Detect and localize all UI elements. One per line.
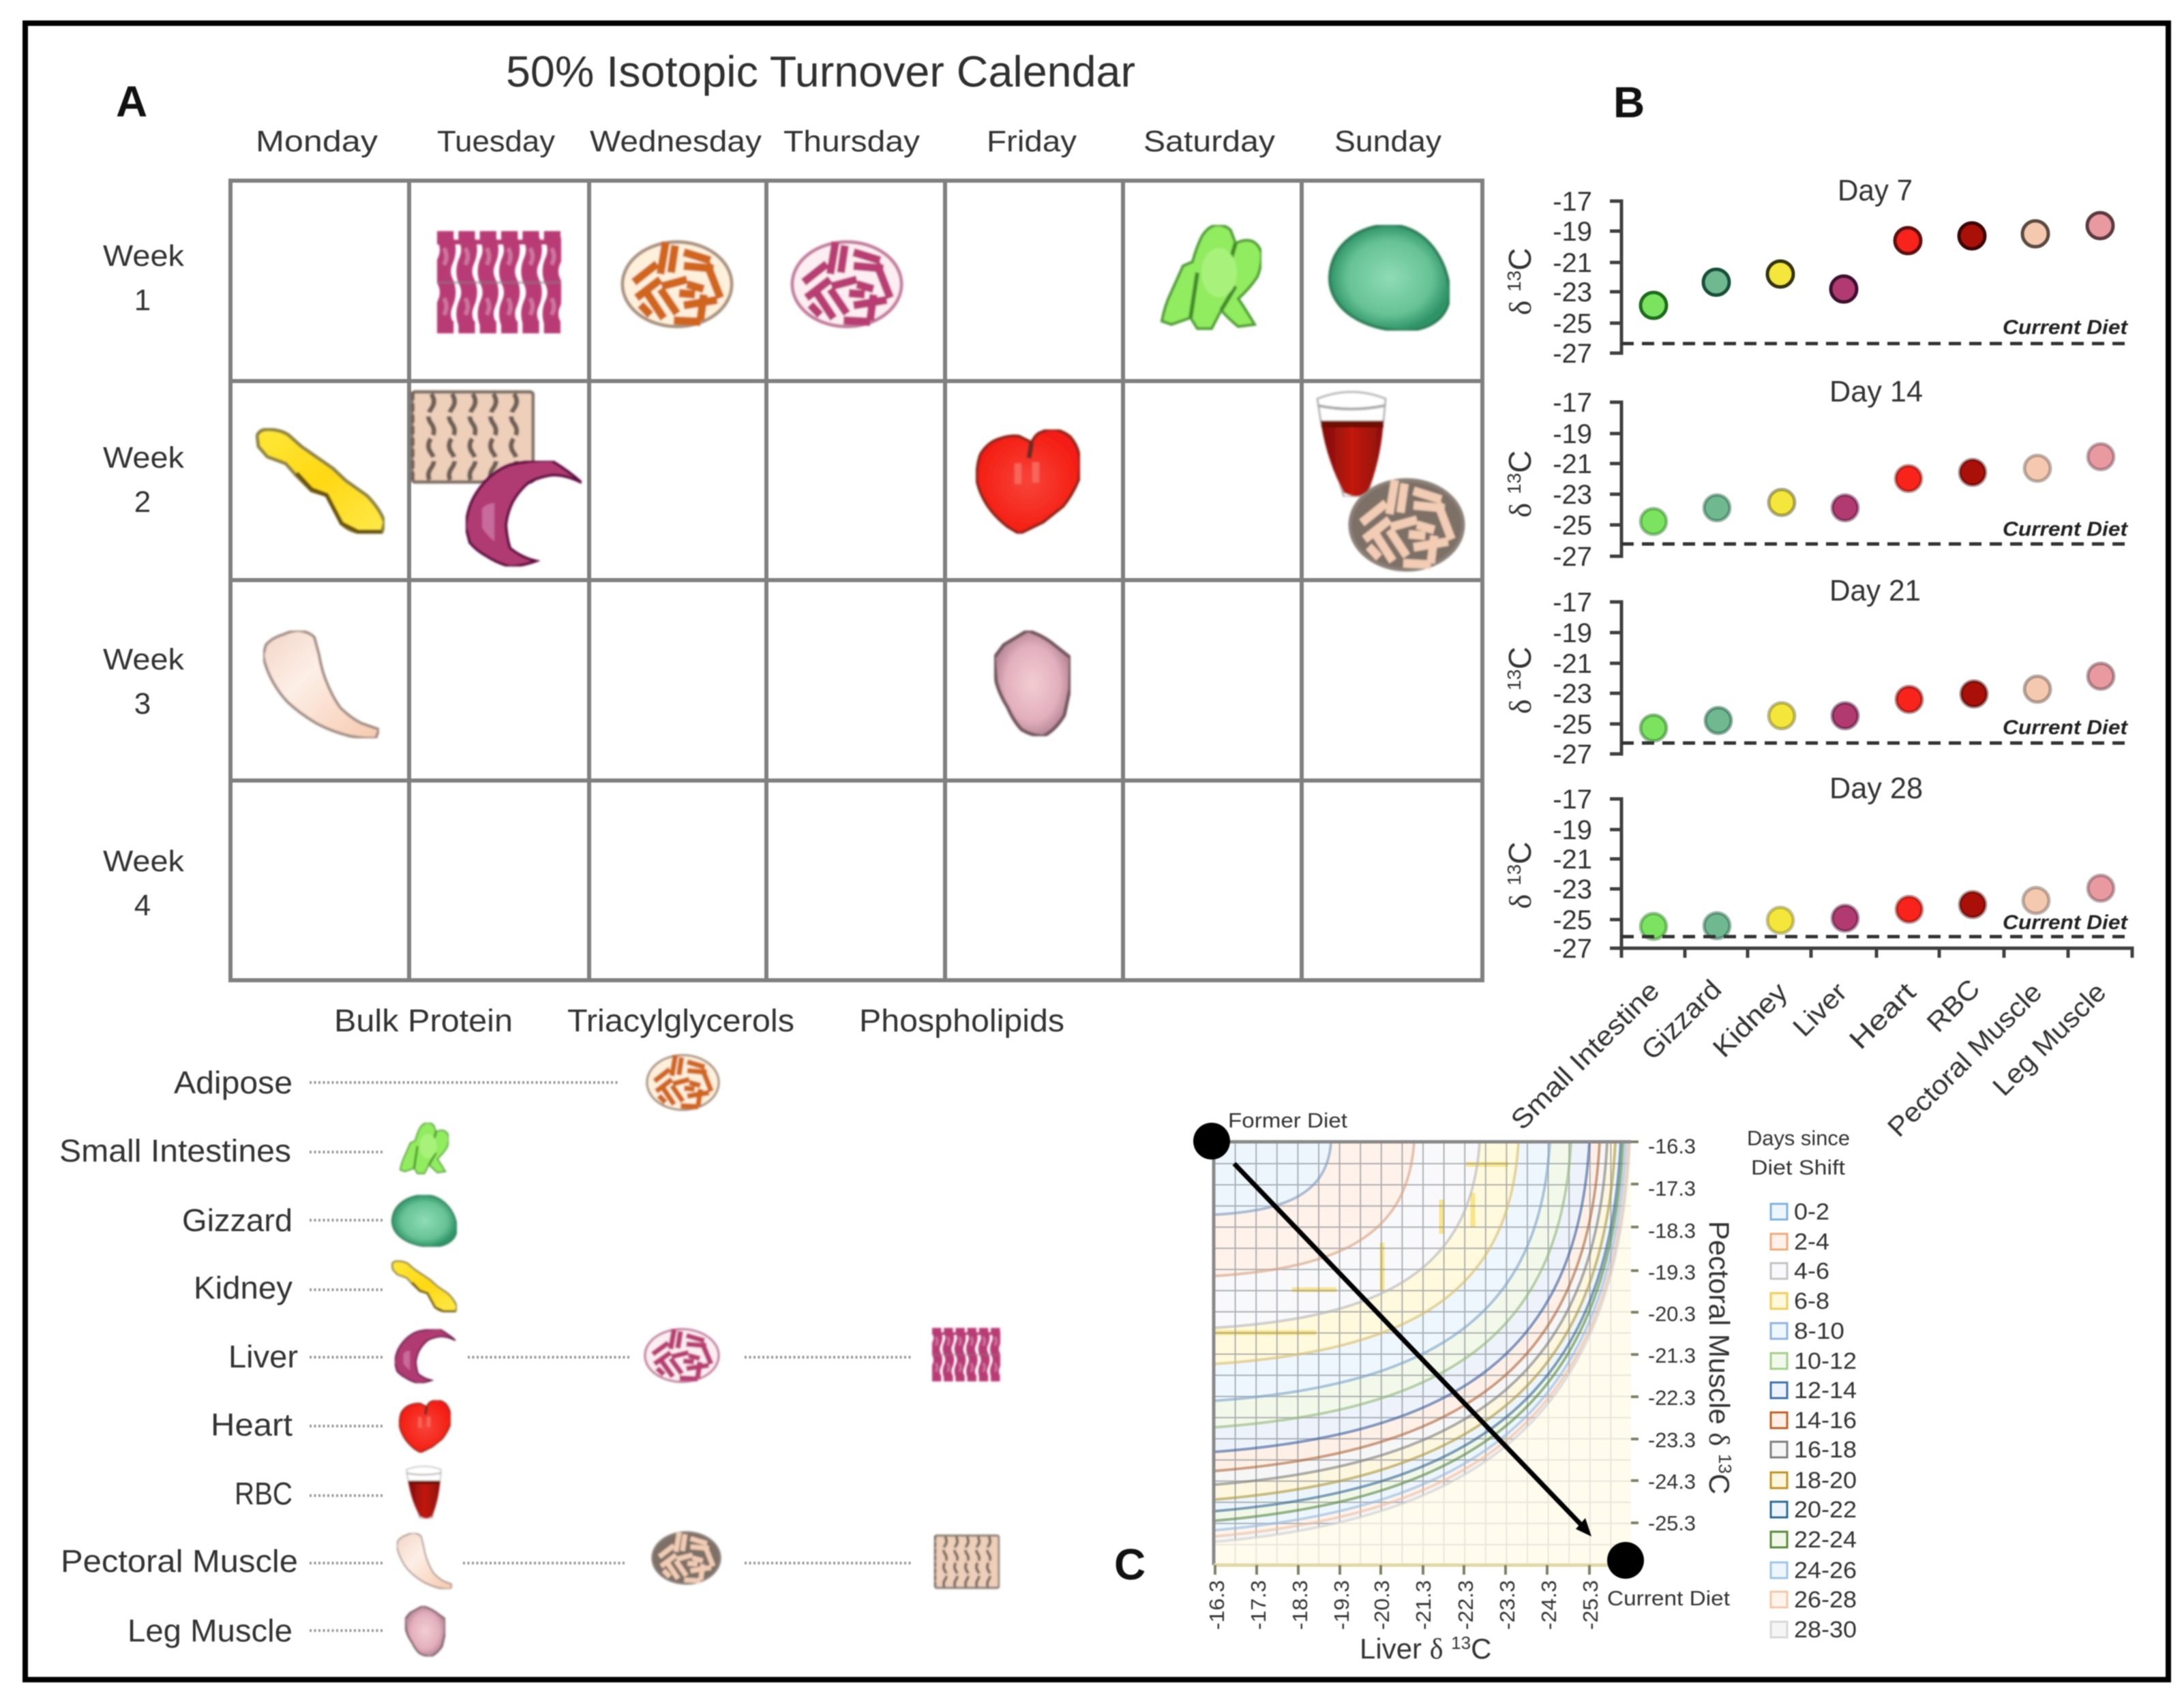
legend: days since diet shift: 22-24: [1794, 1527, 1857, 1553]
chart: Day 28: 13: [1504, 864, 1525, 885]
legend: days since diet shift: 18-20: [1794, 1468, 1857, 1494]
key row: pectoral muscle: Pectoral Muscle: [61, 1543, 298, 1579]
icon: liver triacylglycerols, week 1 Thursday: [792, 242, 901, 327]
right axis values: -25.3: [1648, 1511, 1696, 1535]
legend: days since diet shift: 20-22: [1794, 1497, 1857, 1523]
chart: Day 7: -21: [1553, 248, 1592, 278]
chart: Day 28: Current Diet: [2003, 911, 2129, 934]
bottom axis values: -20.3: [1370, 1580, 1394, 1630]
week row labels: 3: [134, 687, 151, 721]
chart: Day 14: -27: [1553, 542, 1592, 572]
weekday headers: Tuesday: [437, 125, 555, 158]
chart: Day 21: 13: [1504, 669, 1525, 691]
panel A: isotopic turnover calendar: [103, 77, 1482, 980]
title: 50% Isotopic Turnover Calendar: [506, 47, 1135, 96]
chart: Day 7: Current Diet: [2003, 316, 2129, 339]
legend: days since diet shift: 14-16: [1794, 1408, 1857, 1434]
chart: Day 14: 13: [1504, 473, 1525, 494]
y axis title: Pectoral Muscle δ: [1703, 1221, 1735, 1446]
chart: Day 28: [1502, 772, 2132, 964]
legend: days since diet shift: 0-2: [1794, 1199, 1829, 1225]
panel B: tissue isotope values over time: [1502, 78, 2132, 1142]
bottom axis values: -24.3: [1537, 1580, 1561, 1630]
tissue axis labels: Small Intestine: [1506, 975, 1665, 1136]
icon: pectoral phospholipids, week 2 Tuesday: [412, 392, 533, 483]
bottom axis values: -16.3: [1205, 1580, 1229, 1630]
legend: days since diet shift: 12-14: [1794, 1378, 1857, 1404]
chart: Day 7: δ: [1503, 301, 1538, 315]
chart: Day 21: δ: [1503, 699, 1538, 714]
weekday headers: Monday: [256, 125, 378, 158]
chart: Day 7: -17: [1553, 187, 1592, 217]
panel label A: A: [116, 77, 147, 126]
week row labels: Week: [103, 441, 185, 474]
chart: Day 21: Current Diet: [2003, 716, 2129, 739]
chart: Day 21: -23: [1553, 679, 1592, 709]
legend: days since diet shift: Diet Shift: [1751, 1155, 1845, 1179]
icon: pectoral triacylglycerols, week 2 Sunday: [1350, 480, 1463, 570]
legend: days since diet shift: 16-18: [1794, 1437, 1857, 1463]
chart: Day 28: C: [1502, 842, 1538, 864]
chart: Day 21: [1502, 574, 2129, 770]
x axis title: Liver δ: [1360, 1633, 1443, 1665]
bottom axis values: -18.3: [1288, 1580, 1312, 1630]
right axis values: -19.3: [1648, 1260, 1696, 1284]
chart: Day 14: Current Diet: [2003, 518, 2129, 541]
panel label B: B: [1613, 78, 1645, 127]
legend: days since diet shift: 24-26: [1794, 1558, 1857, 1584]
chart: Day 14: δ: [1503, 503, 1538, 517]
key row: leg muscle: [128, 1606, 445, 1656]
key row: liver: Liver: [228, 1339, 298, 1374]
y axis title: C: [1703, 1474, 1735, 1494]
chart: Day 28: δ: [1503, 894, 1538, 909]
key row: gizzard: [182, 1195, 457, 1247]
key row: RBC: RBC: [235, 1476, 293, 1511]
key row: adipose: Adipose: [174, 1065, 293, 1100]
legend: days since diet shift: 4-6: [1794, 1258, 1829, 1284]
right axis values: -21.3: [1648, 1344, 1696, 1367]
former diet label: Former Diet: [1228, 1108, 1347, 1132]
tissue axis labels: Liver: [1787, 977, 1853, 1042]
legend: days since diet shift: [1747, 1126, 1857, 1643]
column headers: [334, 1003, 1064, 1038]
right axis values: -20.3: [1648, 1302, 1696, 1326]
key row: kidney: [194, 1261, 457, 1312]
chart: Day 14: Day 14: [1829, 375, 1923, 408]
chart: Day 7: [1502, 174, 2129, 369]
tissue axis labels: Heart: [1844, 977, 1921, 1055]
tissue axis labels: Kidney: [1707, 977, 1793, 1063]
chart: Day 7: -19: [1553, 217, 1592, 247]
legend: days since diet shift: 10-12: [1794, 1348, 1857, 1374]
key row: small intestines: [59, 1123, 449, 1174]
week row labels: Week: [103, 845, 185, 878]
chart: Day 28: -21: [1553, 845, 1592, 875]
right axis values: -22.3: [1648, 1386, 1696, 1410]
x axis title: 13: [1451, 1633, 1471, 1653]
chart: Day 28: -19: [1553, 815, 1592, 845]
chart: Day 21: C: [1502, 647, 1538, 669]
key row: leg muscle: Leg Muscle: [128, 1613, 293, 1648]
chart: Day 14: C: [1502, 451, 1538, 473]
right axis values: -24.3: [1648, 1470, 1696, 1494]
chart: Day 21: -27: [1553, 740, 1592, 770]
key row: heart: [211, 1400, 451, 1453]
bottom axis values: -19.3: [1330, 1580, 1353, 1630]
calendar grid: [230, 181, 1482, 980]
current diet marker: [1607, 1542, 1644, 1579]
icon: adipose triacylglycerols, week 1 Wednesday: [623, 242, 732, 327]
chart: Day 7: C: [1502, 248, 1538, 271]
chart: Day 21: -19: [1553, 618, 1592, 648]
legend: days since diet shift: 2-4: [1794, 1229, 1829, 1255]
tissue axis labels: RBC: [1921, 973, 1986, 1038]
panel C: liver vs pectoral muscle isotope clock: [1114, 1108, 1857, 1665]
column headers: Bulk Protein: [334, 1003, 513, 1038]
chart: Day 28: -27: [1553, 934, 1592, 964]
column headers: Triacylglycerols: [567, 1003, 794, 1038]
diagonal arrow: [1234, 1164, 1591, 1536]
legend: days since diet shift: 26-28: [1794, 1587, 1857, 1613]
chart: Day 28: Day 28: [1829, 772, 1923, 805]
icon: pectoral muscle, week 3 Monday: [263, 631, 379, 738]
bottom axis values: [1205, 1580, 1602, 1630]
week row labels: [103, 239, 185, 922]
chart: Day 21: -21: [1553, 649, 1592, 679]
weekday headers: Wednesday: [590, 125, 762, 158]
bottom axis values: -17.3: [1246, 1580, 1270, 1630]
y axis title: 13: [1715, 1454, 1735, 1474]
tissue and compound key: [59, 1003, 1064, 1656]
key row: small intestines: Small Intestines: [59, 1133, 291, 1168]
key row: adipose: [174, 1055, 719, 1110]
tissue axis labels: Pectoral Muscle: [1882, 977, 2048, 1142]
chart: Day 28: -17: [1553, 785, 1592, 815]
icon: kidney, week 2 Monday: [257, 429, 385, 532]
key row: heart: Heart: [211, 1407, 293, 1442]
chart: Day 21: -17: [1553, 588, 1592, 618]
weekday headers: Saturday: [1143, 125, 1275, 158]
week row labels: Week: [103, 643, 185, 676]
icon: gizzard, week 1 Sunday: [1330, 225, 1450, 331]
right axis values: -18.3: [1648, 1219, 1696, 1243]
icon: small intestine, week 1 Saturday: [1162, 225, 1261, 329]
former diet marker: [1193, 1123, 1230, 1160]
bottom axis values: -25.3: [1579, 1580, 1602, 1630]
tissue axis labels: [1506, 973, 2112, 1142]
icon: leg muscle, week 3 Friday: [994, 631, 1071, 736]
weekday headers: Friday: [987, 125, 1077, 158]
chart: Day 14: -25: [1553, 511, 1592, 541]
chart: Day 7: 13: [1504, 271, 1525, 292]
week row labels: 1: [134, 284, 151, 317]
weekday headers: Sunday: [1334, 125, 1441, 158]
bottom axis values: -23.3: [1495, 1580, 1519, 1630]
chart: Day 21: Day 21: [1829, 574, 1921, 607]
week row labels: 2: [134, 485, 151, 519]
isoline plot: [1214, 1142, 1639, 1575]
chart: Day 14: -19: [1553, 419, 1592, 449]
chart: Day 7: -25: [1553, 309, 1592, 339]
chart: Day 7: Day 7: [1838, 174, 1913, 207]
week row labels: 4: [134, 889, 151, 922]
chart: Day 14: -23: [1553, 480, 1592, 510]
icon: liver, week 2 Tuesday: [466, 461, 582, 566]
key row: pectoral muscle: [61, 1532, 999, 1589]
legend: days since diet shift: 6-8: [1794, 1288, 1829, 1314]
icon: liver phospholipids, week 1 Tuesday: [437, 237, 561, 327]
bottom axis values: -21.3: [1411, 1580, 1435, 1630]
key row: gizzard: Gizzard: [182, 1202, 293, 1238]
chart: Day 14: -21: [1553, 449, 1592, 479]
chart: Day 28: -25: [1553, 905, 1592, 935]
legend: days since diet shift: 28-30: [1794, 1617, 1857, 1643]
right axis values: [1648, 1134, 1696, 1535]
icon: heart, week 2 Friday: [976, 429, 1080, 534]
tissue axis labels: Leg Muscle: [1987, 977, 2112, 1102]
panel label C: C: [1114, 1540, 1146, 1589]
legend: days since diet shift: 8-10: [1794, 1318, 1844, 1344]
tissue axis labels: Gizzard: [1636, 974, 1727, 1066]
weekday headers: Thursday: [783, 125, 920, 158]
right axis values: -17.3: [1648, 1177, 1696, 1200]
icon: red blood cells tube, week 2 Sunday: [1317, 392, 1386, 497]
weekday headers: [256, 125, 1441, 158]
legend: days since diet shift: Days since: [1747, 1126, 1850, 1150]
key row: kidney: Kidney: [194, 1270, 293, 1305]
chart: Day 14: [1502, 375, 2129, 572]
right axis values: -23.3: [1648, 1428, 1696, 1452]
key row: RBC: [235, 1466, 441, 1519]
chart: Day 14: -17: [1553, 388, 1592, 418]
chart: Day 7: -23: [1553, 277, 1592, 307]
x axis title: C: [1471, 1633, 1491, 1665]
week row labels: Week: [103, 239, 185, 273]
key row: liver: [228, 1329, 1000, 1383]
chart: Day 21: -25: [1553, 710, 1592, 740]
column headers: Phospholipids: [859, 1003, 1064, 1038]
bottom axis values: -22.3: [1454, 1580, 1478, 1630]
current diet label: Current Diet: [1607, 1586, 1730, 1610]
chart: Day 28: -23: [1553, 875, 1592, 905]
right axis values: -16.3: [1648, 1134, 1696, 1158]
chart: Day 7: -27: [1553, 339, 1592, 369]
